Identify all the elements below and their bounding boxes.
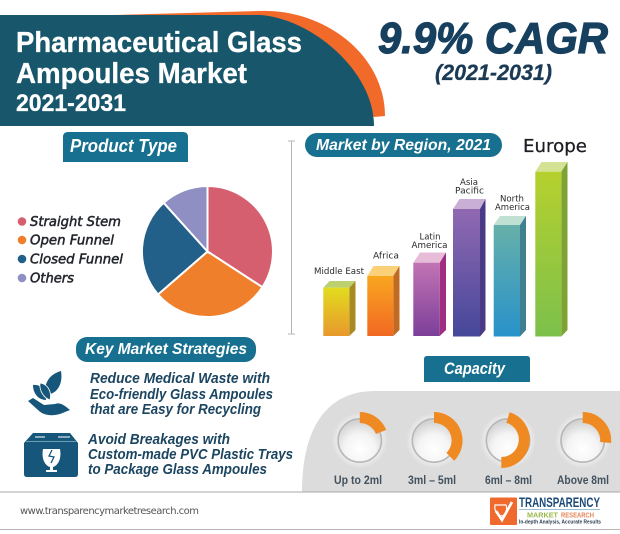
legend: straight stem: Straight Stem — [30, 215, 121, 230]
CAGR period: (2021-2031) — [435, 60, 552, 85]
heading: capacity: Capacity — [444, 359, 506, 378]
bar: North America: America — [495, 203, 530, 213]
legend: closed funnel: Closed Funnel — [30, 252, 123, 268]
heading: product type: Product Type — [70, 136, 177, 156]
orange accent arc — [115, 11, 385, 117]
bar: Asia Pacific: Asia — [460, 178, 478, 188]
bar: Europe: Europe — [523, 136, 587, 157]
bar: Latin America: Latin — [420, 233, 440, 243]
bar: Middle East: Middle East — [314, 267, 364, 277]
logo mark — [490, 498, 517, 525]
header banner — [0, 11, 385, 126]
text: strategy two: Avoid Breakages with — [87, 431, 230, 448]
panel background — [302, 391, 620, 492]
text: strategy one — [90, 370, 273, 418]
teal banner shape — [0, 15, 374, 126]
bar: Europe — [523, 136, 587, 336]
bar chart: market by region — [314, 136, 587, 336]
title: 2021-2031 — [16, 90, 126, 117]
bar: Latin America — [412, 233, 448, 336]
text: strategy one: Reduce Medical Waste with — [90, 370, 270, 387]
heading: key market strategies — [76, 337, 256, 362]
legend: others: Others — [30, 272, 74, 286]
bar: Asia Pacific: Pacific — [455, 187, 484, 197]
pie legend — [18, 215, 123, 286]
heading: capacity — [424, 356, 530, 382]
donut: up to 2ml — [332, 412, 388, 487]
text: strategy one: that are Easy for Recycling — [90, 401, 261, 418]
bar: Latin America: America — [412, 241, 448, 251]
pie chart: product type — [142, 186, 273, 317]
heading: product type — [63, 132, 188, 162]
logo: transparency market research: RESEARCH — [561, 510, 594, 520]
heading: key market strategies: Key Market Strategies — [85, 341, 247, 358]
title: Ampoules Market — [16, 58, 247, 90]
panel: capacity — [302, 391, 620, 492]
title — [16, 27, 302, 117]
logo: transparency market research: MARKET — [527, 510, 558, 520]
heading: market by region: Market by Region, 2021 — [316, 137, 491, 154]
text: strategy two — [87, 431, 293, 478]
bar: Africa: Africa — [373, 252, 399, 262]
logo: transparency market research: In-depth Analysis, Accurate Results — [519, 520, 601, 526]
website url: www.transparencymarketresearch.com — [20, 506, 199, 517]
CAGR value: 9.9% CAGR — [378, 14, 608, 63]
donut: 3ml to 5ml: 3ml – 5ml — [408, 473, 456, 487]
bar: North America: North — [500, 195, 524, 205]
donut: 6ml to 8ml — [480, 412, 536, 487]
slice: others — [164, 186, 208, 252]
icon: fragile box — [24, 433, 78, 477]
bar: Middle East — [314, 267, 364, 336]
logo: transparency market research — [490, 494, 601, 526]
slice: open funnel — [158, 252, 262, 317]
donut: 6ml to 8ml: 6ml – 8ml — [485, 473, 532, 487]
legend: open funnel: Open Funnel — [30, 234, 114, 248]
donut: up to 2ml: Up to 2ml — [334, 473, 382, 487]
bar: North America — [494, 195, 530, 336]
text: strategy two: Custom-made PVC Plastic Trays — [88, 446, 293, 463]
CAGR callout — [378, 14, 608, 85]
donut: above 8ml: Above 8ml — [557, 473, 609, 487]
text: strategy one: Eco-friendly Glass Ampoules — [90, 386, 273, 403]
donut: above 8ml — [555, 412, 611, 487]
icon: leaves in hand — [28, 371, 70, 415]
bar: Asia Pacific — [453, 178, 486, 336]
title: Pharmaceutical Glass — [16, 27, 302, 59]
bar: Africa — [367, 252, 400, 336]
footer — [0, 492, 620, 530]
heading: market by region — [305, 133, 502, 157]
slice: closed funnel — [142, 203, 208, 294]
text: strategy two: to Package Glass Ampoules — [88, 461, 267, 478]
slice: straight stem — [208, 186, 273, 287]
divider axis — [288, 141, 295, 334]
donut: 3ml to 5ml — [406, 412, 462, 487]
